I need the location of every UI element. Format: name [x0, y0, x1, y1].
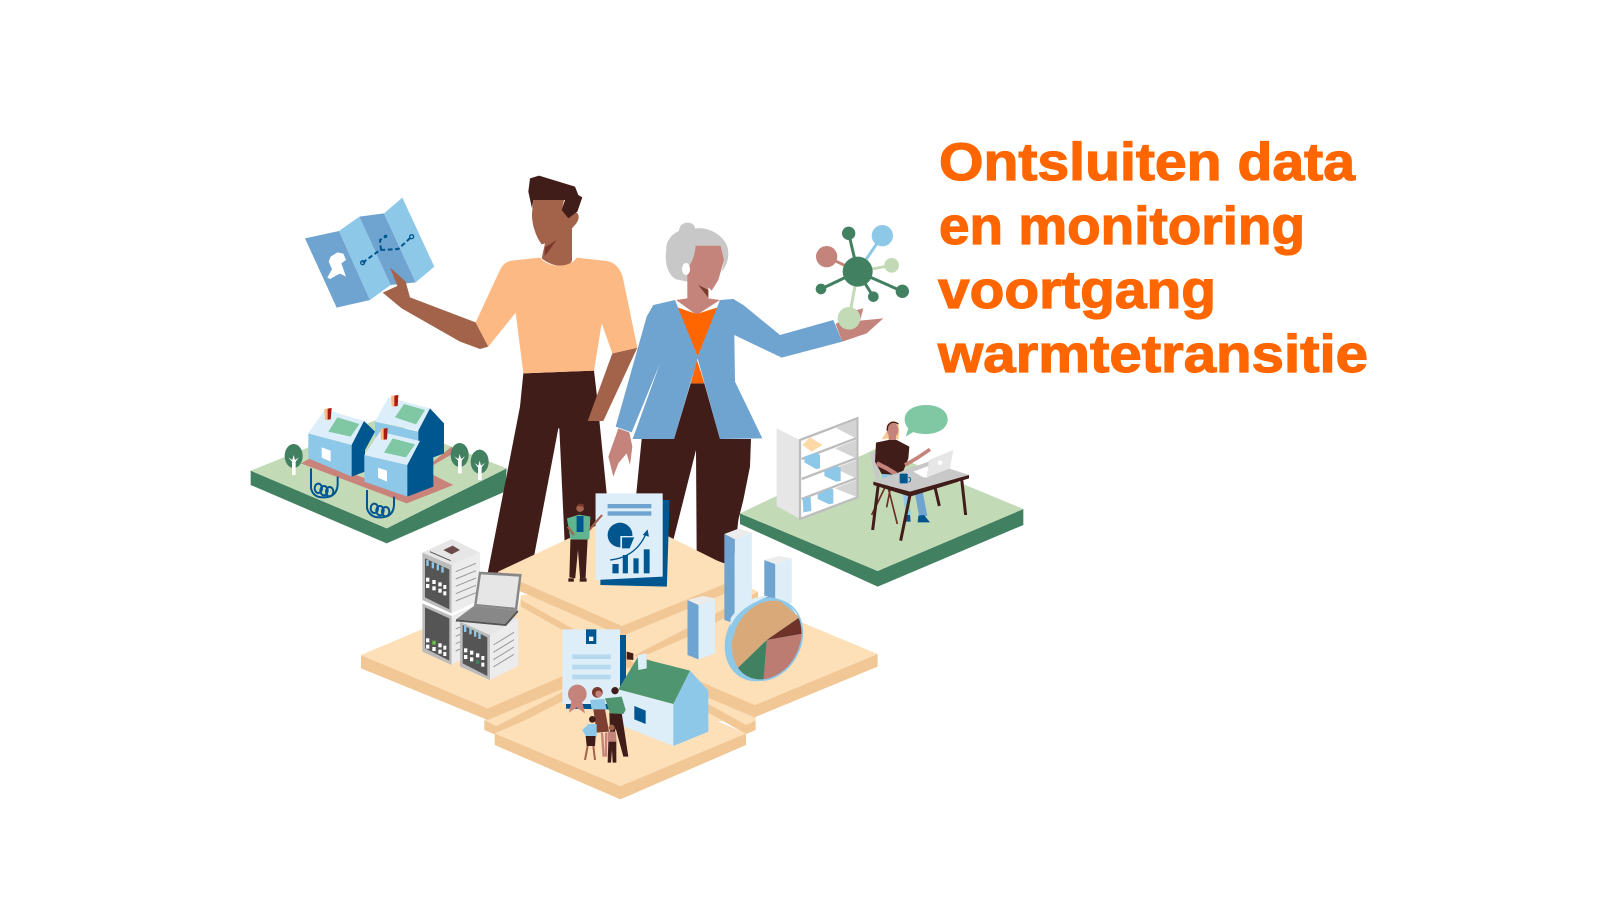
icon: certificate document: [562, 629, 626, 713]
icon: trees: [285, 443, 489, 480]
icon: report document with charts: [596, 493, 670, 587]
title: [937, 133, 1368, 384]
bookshelf: [777, 418, 857, 519]
man hair: [528, 176, 582, 218]
title: warmtetransitie: [937, 325, 1368, 384]
woman orange top: [677, 307, 718, 383]
icon: server rack stack with laptop: [422, 539, 522, 680]
top platform: [498, 513, 746, 636]
woman hair: [666, 223, 728, 282]
man trousers: [487, 371, 607, 577]
man head and arms: [383, 200, 637, 421]
small presenter figure: [567, 504, 602, 582]
icon: house with green roof: [618, 652, 708, 746]
man holding map: [383, 176, 637, 577]
bookshelf and person at desk: [777, 405, 969, 541]
right platform: [643, 605, 878, 717]
icon: pie chart disc: [724, 596, 804, 682]
lower server: [422, 603, 480, 665]
desk worker: [870, 421, 969, 541]
icon: network molecule: [816, 225, 909, 330]
laptop: [456, 572, 522, 626]
icon: house left: [308, 408, 375, 477]
icon: speech bubble: [905, 405, 948, 437]
central orange platforms: [361, 493, 878, 799]
right green platform: [740, 448, 1023, 587]
upper server: [422, 539, 480, 613]
woman trousers: [636, 383, 751, 567]
woman blazer: [616, 299, 842, 439]
woman holding network: [608, 223, 909, 567]
left green platform with houses: [251, 395, 507, 543]
bottom platform: [495, 680, 746, 799]
icon: folded map: [305, 198, 434, 308]
title: voortgang: [938, 261, 1216, 320]
man t-shirt: [476, 258, 637, 373]
icon: 3D bar chart: [688, 528, 792, 659]
icon: house back: [375, 395, 444, 457]
woman face, neck and hands: [608, 246, 883, 477]
connecting strips: [484, 588, 758, 735]
infographic canvas: [250, 140, 1367, 800]
front server: [460, 617, 518, 680]
icon: ground heat coils: [311, 468, 394, 517]
platform base: [495, 592, 758, 725]
icon: house front: [364, 428, 433, 497]
title: Ontsluiten data: [939, 133, 1356, 192]
family figures: [582, 687, 628, 763]
left platform: [361, 602, 612, 720]
certificate, house and family: [562, 629, 708, 763]
title: en monitoring: [939, 197, 1305, 256]
